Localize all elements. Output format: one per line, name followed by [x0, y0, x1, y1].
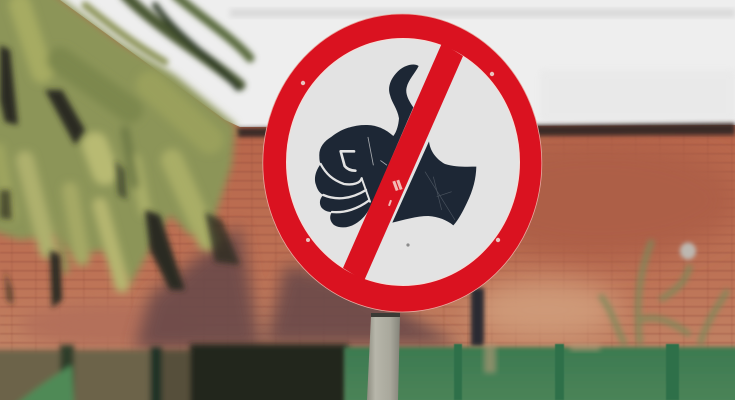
sign post	[367, 313, 400, 400]
palm fronds	[0, 0, 250, 308]
palm shadow on the wall	[135, 225, 460, 350]
white roof	[0, 0, 735, 127]
rivets	[301, 72, 500, 247]
dark wall post behind sign	[471, 288, 484, 346]
shrub on the right	[600, 240, 728, 345]
green fence	[344, 343, 735, 400]
thumbs up icon	[315, 65, 476, 227]
bar scratches	[388, 180, 403, 206]
red sign disc	[263, 14, 542, 312]
red diagonal bar	[343, 43, 463, 281]
left dark fence	[0, 344, 350, 400]
roof shadow line	[236, 123, 735, 137]
no-thumbs-up prohibition sign	[263, 14, 542, 312]
brick wall	[0, 120, 735, 400]
wall lamp	[680, 242, 696, 260]
white sign face	[286, 38, 520, 286]
